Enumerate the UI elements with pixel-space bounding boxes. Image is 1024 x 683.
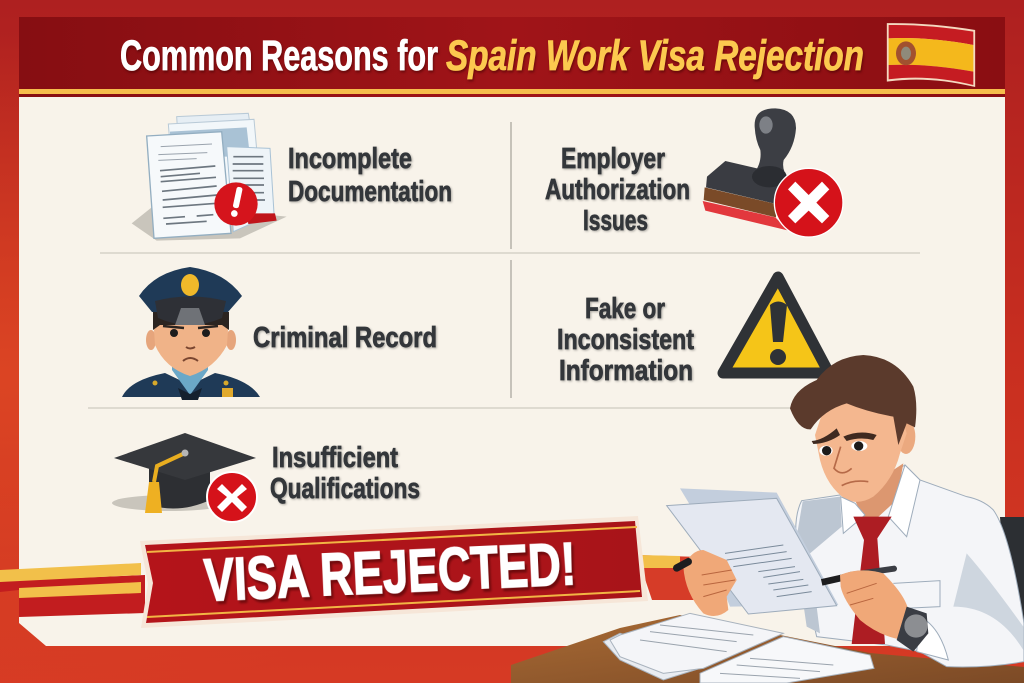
header band (19, 17, 1005, 97)
hair (790, 355, 916, 445)
ear (897, 419, 915, 454)
neck (853, 463, 903, 518)
ribbon tail: left (0, 563, 145, 617)
right hand (840, 570, 907, 640)
label: Employer Authorization Issues: Issues (583, 205, 648, 237)
label: Insufficient Qualifications: Insufficient (272, 442, 398, 474)
icon: warning triangle (723, 277, 829, 373)
banner: VISA REJECTED: VISA REJECTED! (203, 530, 577, 614)
chair (1000, 517, 1024, 660)
left pen (677, 562, 688, 568)
collar (841, 465, 920, 537)
finger lines (702, 570, 735, 597)
brows (812, 428, 877, 444)
label: Employer Authorization Issues (545, 143, 690, 237)
shirt shading (795, 497, 842, 633)
label: Incomplete Documentation: Documentation (288, 176, 452, 208)
pen right (822, 576, 850, 582)
label: Insufficient Qualifications (270, 442, 420, 505)
label: Fake or Inconsistent Information: Fake or (585, 293, 665, 325)
desk (511, 615, 1024, 683)
lower paper stack (603, 633, 700, 680)
front paper (667, 498, 837, 614)
watch (897, 607, 928, 652)
label: Employer Authorization Issues: Employer (561, 143, 665, 175)
nose and mouth (834, 447, 868, 486)
label: Insufficient Qualifications: Qualifications (270, 473, 420, 505)
cuff (917, 617, 948, 660)
banner: VISA REJECTED (140, 516, 648, 628)
icon: documents with alert (132, 113, 287, 241)
tie (852, 517, 892, 644)
dividers (88, 122, 920, 408)
label: Criminal Record: Criminal Record (253, 322, 437, 354)
pocket (893, 581, 940, 608)
label: Fake or Inconsistent Information: Information (559, 355, 693, 387)
icon: rubber stamp with X (703, 108, 843, 237)
desk papers (610, 613, 783, 673)
eyes (819, 446, 833, 456)
icon: graduation cap with X (112, 433, 257, 522)
label: Fake or Inconsistent Information (557, 293, 694, 387)
shirt (796, 465, 1024, 667)
label: Incomplete Documentation: Incomplete (288, 143, 412, 175)
back paper (680, 488, 838, 607)
left hand (683, 550, 737, 616)
icon: Spanish flag (888, 24, 974, 86)
paper text (725, 545, 812, 597)
label: Employer Authorization Issues: Authorization (545, 174, 690, 206)
title: Common Reasons for (120, 32, 438, 80)
label: Incomplete Documentation (288, 143, 452, 208)
face (815, 400, 907, 502)
sleeve shading (953, 553, 1023, 650)
title: Spain Work Visa Rejection (446, 32, 864, 80)
icon: police officer (122, 267, 260, 400)
figure: worried man reading documents (603, 355, 1024, 683)
ribbon tail: right (637, 555, 700, 600)
label: Fake or Inconsistent Information: Inconsistent (557, 324, 694, 356)
panel: cream content area (19, 97, 1005, 646)
title (120, 32, 864, 80)
